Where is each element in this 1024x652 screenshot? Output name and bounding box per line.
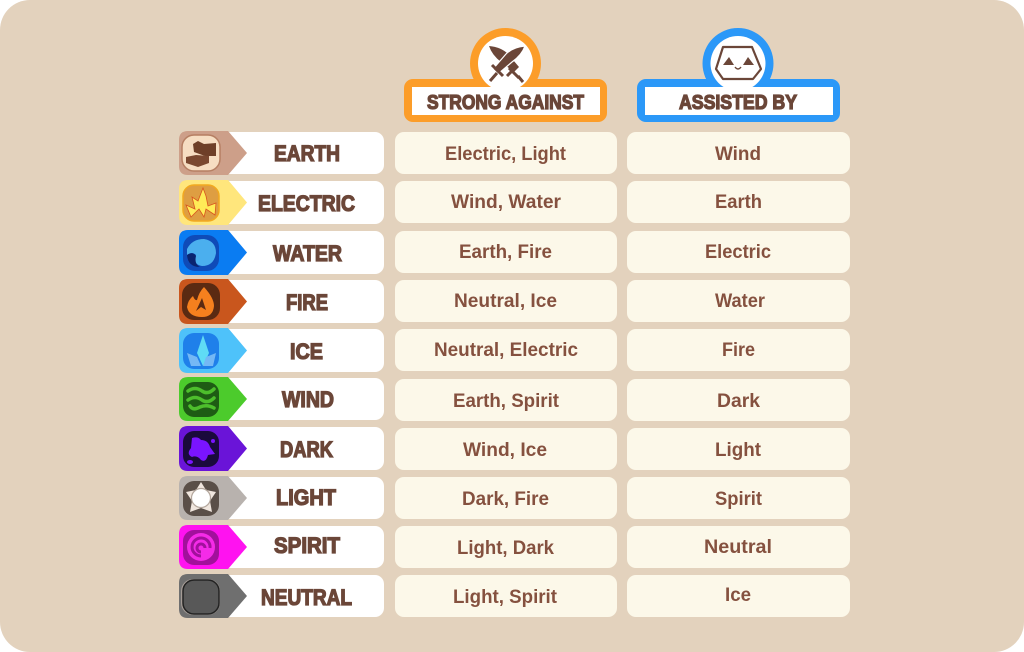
cell: wind strong against bbox=[395, 379, 617, 421]
cell: ice strong against bbox=[395, 329, 617, 371]
header: strong against bbox=[404, 28, 607, 122]
row label: earth bbox=[179, 131, 384, 175]
row label: water: WATER bbox=[273, 241, 342, 266]
row label: fire bbox=[179, 279, 384, 324]
cell: neutral assisted by: Ice bbox=[725, 585, 751, 606]
cell: electric assisted by: Earth bbox=[715, 192, 762, 213]
row label: wind: WIND bbox=[282, 387, 334, 412]
row label: dark: DARK bbox=[280, 437, 333, 462]
row label: electric: ELECTRIC bbox=[258, 191, 355, 216]
cell: dark strong against: Wind, Ice bbox=[463, 440, 547, 461]
row label: ice: ICE bbox=[290, 339, 323, 364]
column: strong against bbox=[395, 132, 617, 617]
cell: ice assisted by bbox=[627, 329, 850, 371]
row label: light: LIGHT bbox=[276, 485, 337, 510]
cell: neutral strong against bbox=[395, 575, 617, 617]
cell: earth strong against bbox=[395, 132, 617, 174]
cell: ice strong against: Neutral, Electric bbox=[434, 340, 578, 361]
cell: electric assisted by bbox=[627, 181, 850, 223]
cell: light strong against: Dark, Fire bbox=[462, 489, 549, 510]
cell: fire assisted by bbox=[627, 280, 850, 322]
cell: water strong against bbox=[395, 231, 617, 273]
cell: dark assisted by bbox=[627, 428, 850, 470]
cell: fire assisted by: Water bbox=[715, 291, 766, 312]
row label: spirit bbox=[179, 525, 384, 569]
row label: electric bbox=[179, 180, 384, 225]
cell: earth strong against: Electric, Light bbox=[445, 144, 567, 165]
cell: earth assisted by: Wind bbox=[715, 144, 761, 165]
column: assisted by bbox=[627, 132, 850, 617]
cell: electric strong against bbox=[395, 181, 617, 223]
cell: electric strong against: Wind, Water bbox=[451, 192, 562, 213]
icon: hexagon face bbox=[716, 47, 761, 79]
cell: light assisted by bbox=[627, 477, 850, 519]
cell: neutral strong against: Light, Spirit bbox=[453, 587, 558, 608]
cell: wind assisted by: Dark bbox=[717, 391, 760, 412]
heading: assisted by: ASSISTED BY bbox=[679, 92, 798, 114]
cell: spirit assisted by: Neutral bbox=[704, 537, 772, 558]
cell: wind strong against: Earth, Spirit bbox=[453, 391, 560, 412]
cell: spirit strong against: Light, Dark bbox=[457, 538, 554, 559]
cell: light strong against bbox=[395, 477, 617, 519]
heading: strong against: STRONG AGAINST bbox=[427, 92, 584, 114]
cell: neutral assisted by bbox=[627, 575, 850, 617]
cell: water assisted by bbox=[627, 231, 850, 273]
row label: ice bbox=[179, 328, 384, 373]
cell: spirit assisted by bbox=[627, 526, 850, 568]
row label: spirit: SPIRIT bbox=[274, 533, 341, 558]
cell: light assisted by: Spirit bbox=[715, 489, 763, 510]
cell: water assisted by: Electric bbox=[705, 242, 771, 263]
cell: wind assisted by bbox=[627, 379, 850, 421]
cell: fire strong against: Neutral, Ice bbox=[454, 291, 557, 312]
cell: dark assisted by: Light bbox=[715, 440, 762, 461]
row label: water bbox=[179, 230, 384, 275]
cell: earth assisted by bbox=[627, 132, 850, 174]
row label: light bbox=[179, 476, 384, 520]
row label: neutral bbox=[179, 574, 384, 618]
cell: dark strong against bbox=[395, 428, 617, 470]
cell: fire strong against bbox=[395, 280, 617, 322]
cell: water strong against: Earth, Fire bbox=[459, 242, 552, 263]
row label: dark bbox=[179, 426, 384, 471]
row label: earth: EARTH bbox=[274, 141, 340, 166]
row label: neutral: NEUTRAL bbox=[261, 585, 352, 610]
row label: wind bbox=[179, 377, 384, 421]
row label: fire: FIRE bbox=[286, 290, 328, 315]
cell: ice assisted by: Fire bbox=[722, 340, 755, 361]
icon: crossed swords bbox=[489, 46, 525, 82]
cell: spirit strong against bbox=[395, 526, 617, 568]
header: assisted by bbox=[637, 28, 840, 122]
